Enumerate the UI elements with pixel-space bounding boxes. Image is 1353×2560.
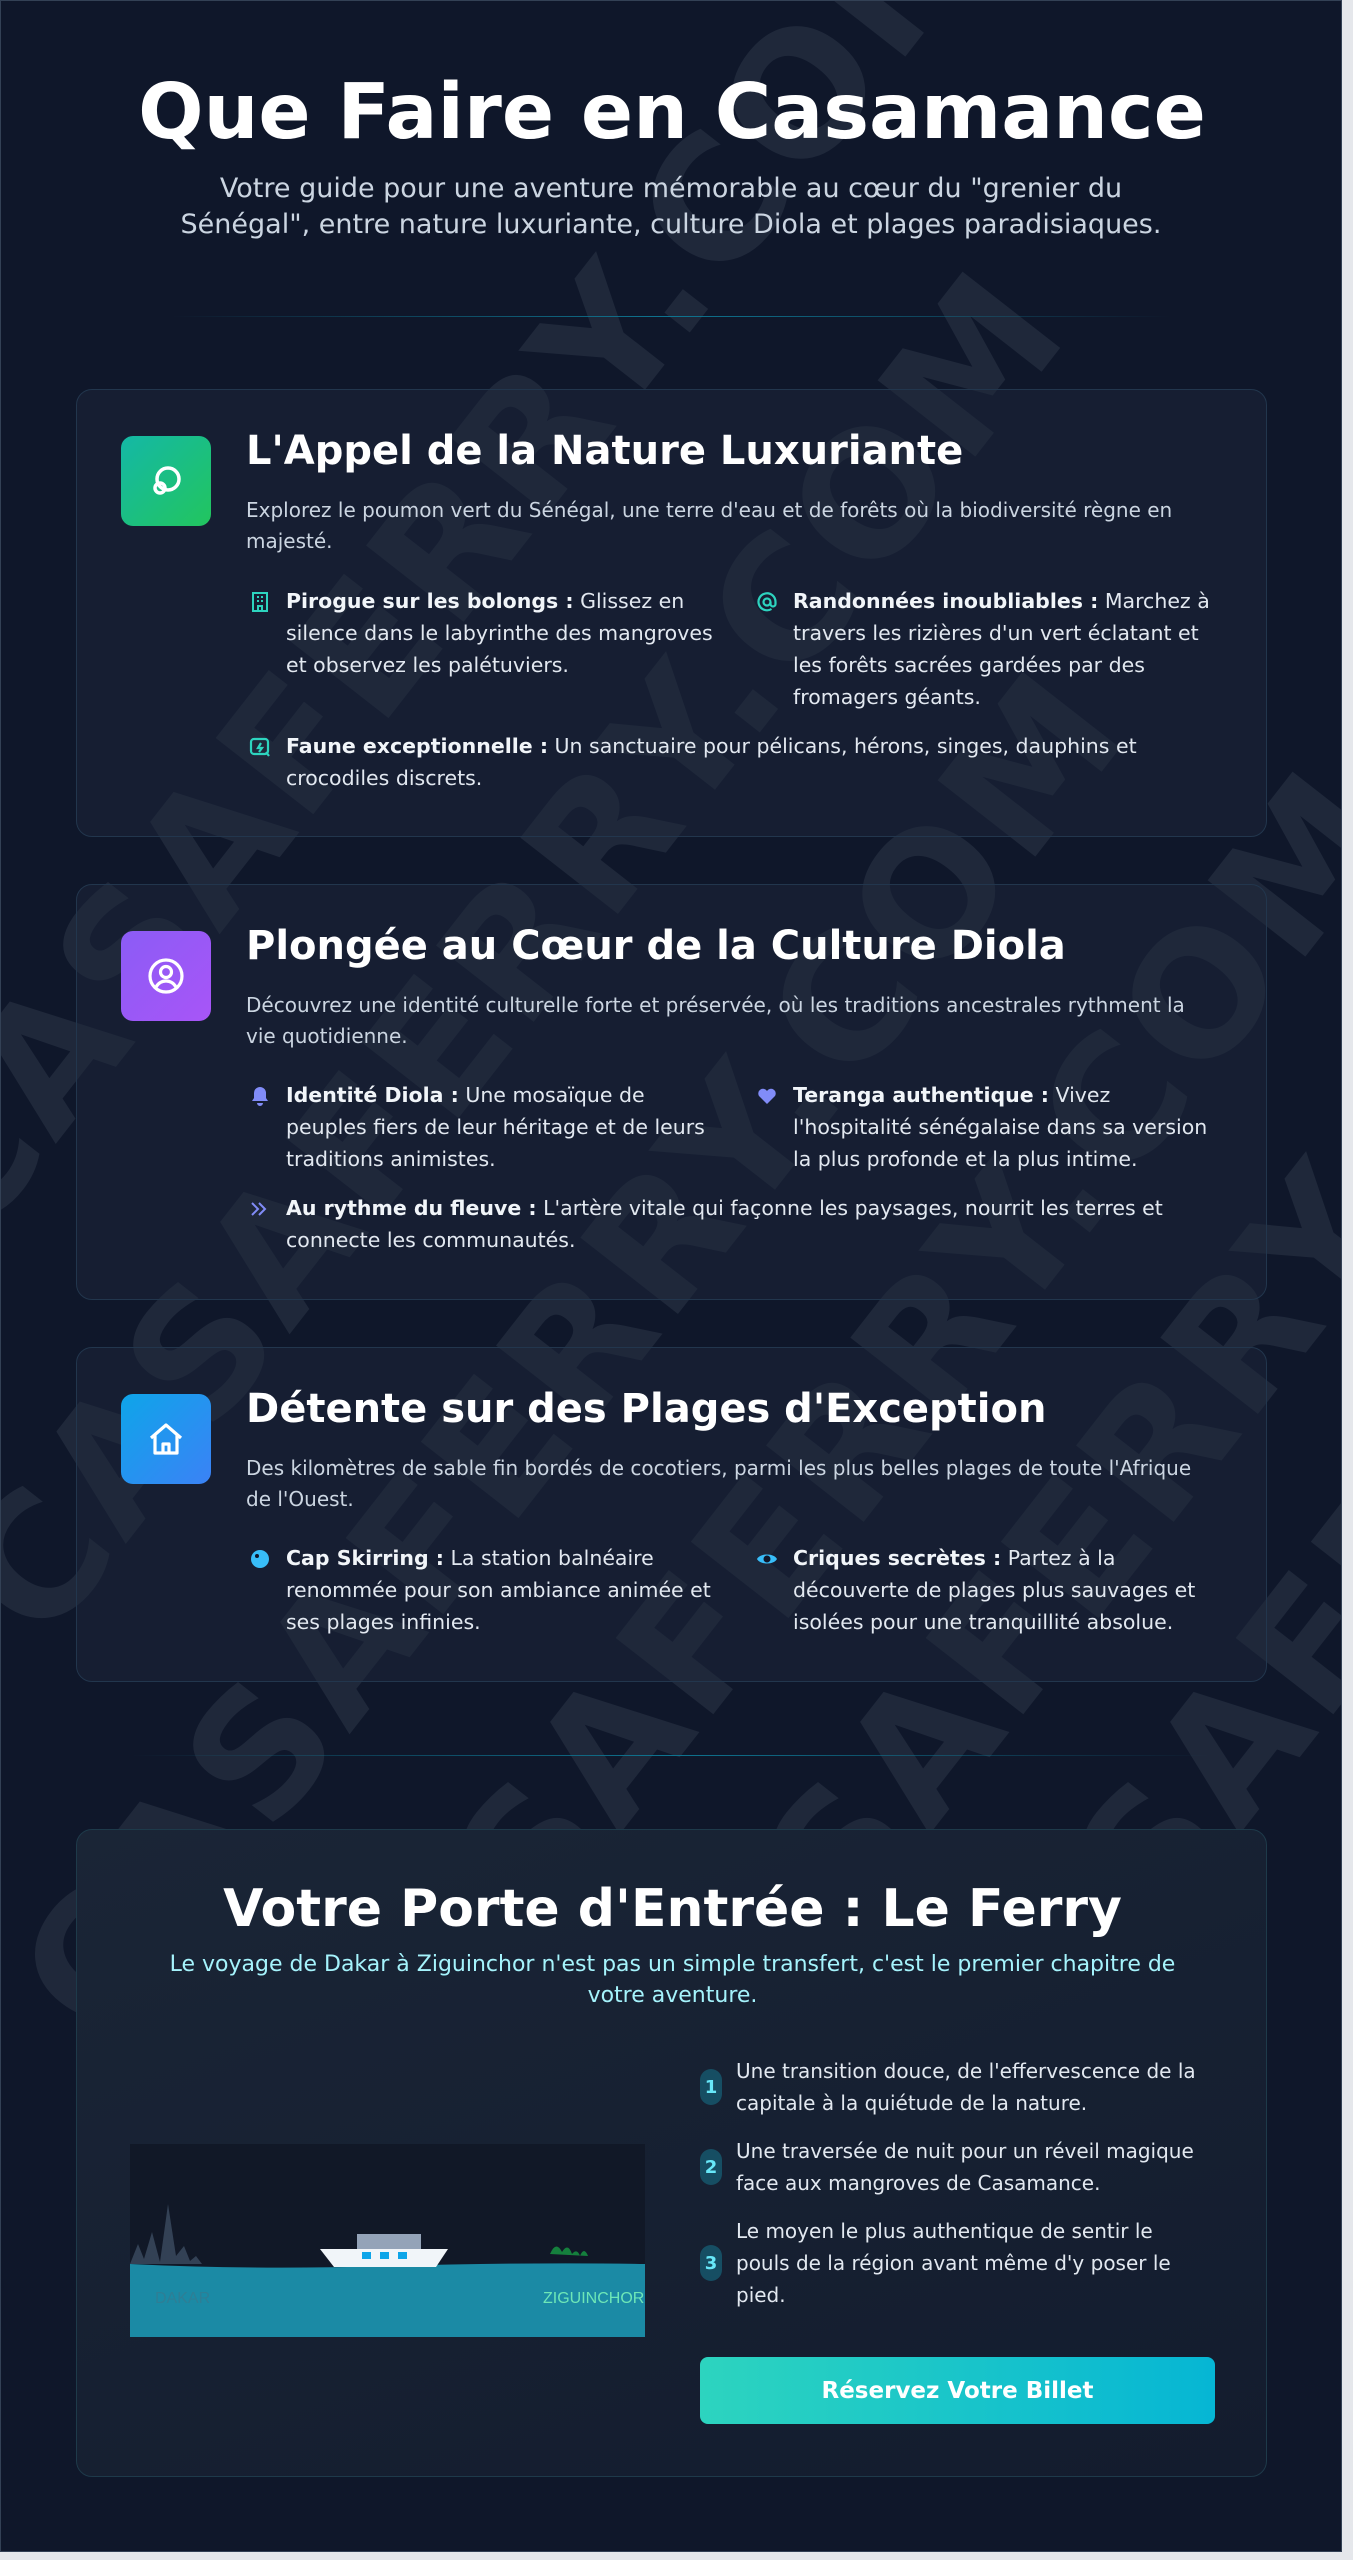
- item: randonnées: Randonnées inoubliables : Marchez à travers les rizières d'un vert éclatant et les forêts sacrées gardées par des fromagers géants.: [793, 589, 1210, 709]
- watermark background: CASAFERRY.COM: [0, 634, 1166, 2073]
- description: Explorez le poumon vert du Sénégal, une terre d'eau et de forêts où la biodiversité règne en majesté.: [246, 498, 1172, 553]
- panel: culture: [76, 884, 1267, 1300]
- heading: Plongée au Cœur de la Culture Diola: [246, 923, 1066, 969]
- illustration: ferry crossing: [130, 2144, 645, 2337]
- item: identité: Identité Diola : Une mosaïque de peuples fiers de leur héritage et de leurs traditions animistes.: [286, 1083, 705, 1171]
- heading: Détente sur des Plages d'Exception: [246, 1386, 1046, 1432]
- item: faune: Faune exceptionnelle : Un sanctuaire pour pélicans, hérons, singes, dauphins et crocodiles discrets.: [286, 734, 1137, 790]
- item 2: Une traversée de nuit pour un réveil magique face aux mangroves de Casamance.: [736, 2139, 1194, 2195]
- item: teranga: Teranga authentique : Vivez l'hospitalité sénégalaise dans sa version la plus profonde et la plus intime.: [793, 1083, 1207, 1171]
- description: Des kilomètres de sable fin bordés de cocotiers, parmi les plus belles plages de toute l'Afrique de l'Ouest.: [246, 1456, 1191, 1511]
- heading: L'Appel de la Nature Luxuriante: [246, 428, 963, 474]
- item 1: 1: [705, 2076, 717, 2098]
- icon: nature: [121, 436, 211, 526]
- item: pirogue: Pirogue sur les bolongs : Glissez en silence dans le labyrinthe des mangroves et observez les palétuviers.: [286, 589, 713, 677]
- panel: ferry: [76, 1829, 1267, 2477]
- title: Que Faire en Casamance: [138, 68, 1206, 157]
- icon: culture: [121, 931, 211, 1021]
- panel: nature: [76, 389, 1267, 837]
- item 2: 2: [705, 2156, 717, 2178]
- icon: plage: [121, 1394, 211, 1484]
- item: fleuve: Au rythme du fleuve : L'artère vitale qui façonne les paysages, nourrit les terres et connecte les communautés.: [286, 1196, 1163, 1252]
- item: criques: Criques secrètes : Partez à la découverte de plages plus sauvages et isolées pour une tranquillité absolue.: [793, 1546, 1195, 1634]
- item 1: Une transition douce, de l'effervescence de la capitale à la quiétude de la nature.: [736, 2059, 1196, 2115]
- heading: ferry: Votre Porte d'Entrée : Le Ferry: [223, 1879, 1122, 1939]
- button: réserver: [700, 2357, 1215, 2424]
- list: ferry benefits: [700, 2059, 1196, 2307]
- illustration: ferry crossing: DAKAR: [155, 2290, 210, 2307]
- panel: plages: [76, 1347, 1267, 1682]
- subtitle: Votre guide pour une aventure mémorable au cœur du "grenier du Sénégal", entre nature luxuriante, culture Diola et plages paradisiaques.: [181, 173, 1161, 240]
- item 3: 3: [705, 2252, 717, 2274]
- item: cap skirring: Cap Skirring : La station balnéaire renommée pour son ambiance animée et ses plages infinies.: [286, 1546, 711, 1634]
- button: réserver: Réservez Votre Billet: [822, 2378, 1094, 2404]
- subtitle: ferry: Le voyage de Dakar à Ziguinchor n'est pas un simple transfert, c'est le premier chapitre de votre aventure.: [170, 1952, 1175, 2008]
- item 3: Le moyen le plus authentique de sentir le pouls de la région avant même d'y poser le pied.: [736, 2219, 1171, 2307]
- illustration: ferry crossing: ZIGUINCHOR: [543, 2290, 644, 2307]
- description: Découvrez une identité culturelle forte et préservée, où les traditions ancestrales rythment la vie quotidienne.: [246, 993, 1185, 1048]
